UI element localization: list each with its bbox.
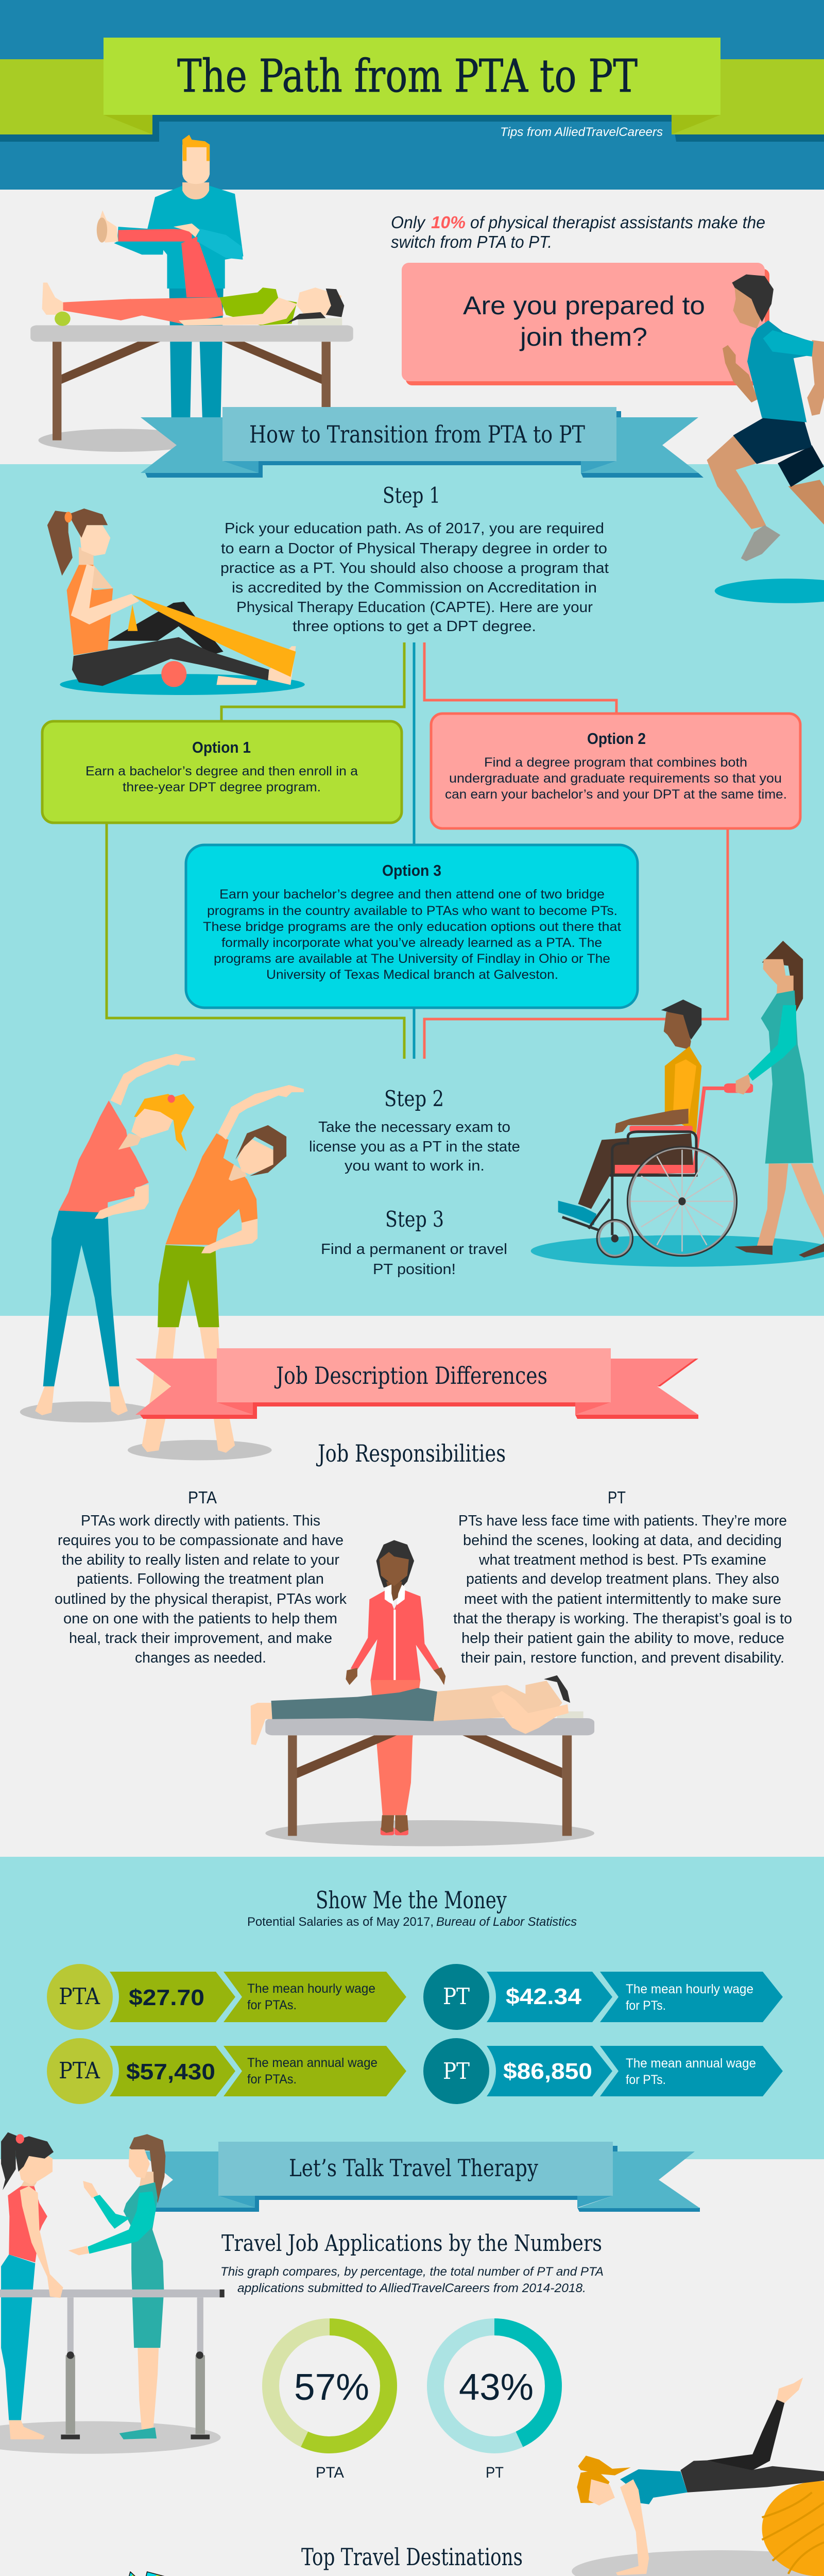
title text: The Path from PTA to PT <box>177 49 638 103</box>
background: steps band <box>0 464 824 1316</box>
panel: option 3: programs are available at The University of Findlay in Ohio or The <box>214 952 610 966</box>
column: PT responsibilities: behind the scenes, looking at data, and deciding <box>463 1532 782 1549</box>
panel: option 2: Option 2 <box>587 730 646 748</box>
intro statistic text: of physical therapist assistants make the <box>470 213 765 232</box>
column: PTA responsibilities: changes as needed. <box>135 1650 266 1666</box>
banner: job description differences <box>135 1348 698 1419</box>
salary card: PTA hourly: The mean hourly wage <box>247 1981 375 1996</box>
salary card: PT hourly <box>423 1964 783 2030</box>
salary card: PT hourly: PT <box>443 1984 470 2010</box>
intro statistic text: Only <box>391 213 426 232</box>
column: PTA responsibilities: heal, track their improvement, and make <box>69 1630 332 1647</box>
panel: option 3: University of Texas Medical branch at Galveston. <box>266 968 558 982</box>
text: graph description: applications submitted to AlliedTravelCareers from 2014-2018. <box>237 2281 586 2295</box>
shadow: runner <box>715 579 824 603</box>
banner: job description differences: Job Description Differences <box>274 1362 547 1389</box>
column: PTA responsibilities: PTAs work directly with patients. This <box>81 1513 320 1529</box>
heading: step 2: Step 2 <box>384 1086 444 1111</box>
salary card: PTA annual: PTA <box>59 2058 100 2084</box>
panel: option 3: programs in the country available to PTAs who want to become PTs. <box>207 904 617 918</box>
panel: option 3 <box>186 845 638 1008</box>
text: step 1 description: practice as a PT. You should also choose a program that <box>220 560 609 577</box>
panel: option 2: Find a degree program that combines both <box>484 755 747 770</box>
heading: top travel destinations: Top Travel Destinations <box>301 2543 523 2571</box>
panel: option 3: Earn your bachelor’s degree and then attend one of two bridge <box>219 887 605 902</box>
column: PTA responsibilities <box>55 1488 347 1666</box>
map: United States with highlighted states <box>97 2572 578 2576</box>
text: salary subtitle <box>247 1915 577 1929</box>
title ribbon <box>0 38 824 142</box>
illustration: two women stretching <box>20 1054 304 1460</box>
callout: are you prepared: join them? <box>519 323 647 351</box>
panel: option 1 <box>42 721 402 823</box>
column: PT responsibilities: patients and develop treatment plans. They also <box>466 1571 779 1587</box>
salary card: PT annual: $86,850 <box>503 2059 592 2084</box>
text: step 1 description: is accredited by the Commission on Accreditation in <box>232 580 597 596</box>
tagline: Tips from AlliedTravelCareers <box>500 125 663 139</box>
text: step 1 description: to earn a Doctor of Physical Therapy degree in order to <box>221 540 607 557</box>
donut chart: PTA 57%: PTA <box>316 2464 344 2481</box>
donut chart: PTA 57% <box>271 2327 388 2481</box>
panel: option 1: three-year DPT degree program. <box>123 780 321 794</box>
panel: option 2: can earn your bachelor’s and your DPT at the same time. <box>445 787 787 802</box>
salary card: PTA annual <box>47 2038 406 2104</box>
column: PT responsibilities: meet with the patient intermittently to make sure <box>464 1591 781 1607</box>
text: step 1 description <box>220 520 609 635</box>
column: PT responsibilities: PT <box>608 1488 626 1507</box>
salary card: PTA annual: The mean annual wage <box>247 2056 377 2070</box>
text: graph description: This graph compares, by percentage, the total number of PT and PTA <box>220 2265 604 2279</box>
banner: let's talk travel therapy <box>139 2142 700 2212</box>
donut chart: PT 43%: 43% <box>459 2367 534 2408</box>
text: step 2 description <box>309 1119 520 1174</box>
illustration: woman exercising on ball <box>572 2378 824 2576</box>
banner: how to transition: How to Transition from PTA to PT <box>249 420 585 448</box>
heading: step 3: Step 3 <box>385 1207 444 1232</box>
text: step 3 description: PT position! <box>373 1261 456 1278</box>
salary card: PT hourly: The mean hourly wage <box>626 1982 753 1996</box>
illustration: women at parallel bars <box>0 2132 225 2454</box>
salary card: PT hourly: for PTs. <box>626 1998 666 2013</box>
column: PTA responsibilities: patients. Following the treatment plan <box>77 1571 324 1587</box>
text: step 1 description: Physical Therapy Education (CAPTE). Here are your <box>236 599 593 616</box>
column: PT responsibilities: that the therapy is working. The therapist’s goal is to <box>453 1611 792 1627</box>
text: step 2 description: license you as a PT in the state <box>309 1139 520 1155</box>
column: PT responsibilities: their pain, restore function, and prevent disability. <box>461 1650 784 1666</box>
column: PT responsibilities <box>453 1488 792 1666</box>
text: salary subtitle: Bureau of Labor Statistics <box>436 1915 577 1929</box>
salary card: PTA annual: $57,430 <box>126 2059 215 2084</box>
intro statistic text: 10% <box>431 213 466 232</box>
callout: are you prepared: Are you prepared to <box>463 291 705 320</box>
panel: option 3: Option 3 <box>382 861 441 879</box>
column: PTA responsibilities: the ability to really listen and relate to your <box>62 1552 339 1568</box>
panel: option 2 <box>431 714 800 828</box>
donut chart: PT 43%: PT <box>486 2464 504 2481</box>
text: step 3 description <box>321 1241 507 1278</box>
illustration: woman with resistance band <box>47 509 305 695</box>
text: salary subtitle: Potential Salaries as of May 2017, <box>247 1915 434 1929</box>
column: PT responsibilities: help their patient gain the ability to move, reduce <box>461 1630 784 1647</box>
panel: option 2: undergraduate and graduate requirements so that you <box>449 771 782 786</box>
background: salary band <box>0 1857 824 2159</box>
intro statistic text <box>391 213 765 251</box>
text: step 2 description: Take the necessary exam to <box>318 1119 510 1136</box>
donut chart: PTA 57%: 57% <box>294 2367 369 2408</box>
banner: let's talk travel therapy: Let’s Talk Travel Therapy <box>289 2154 538 2182</box>
salary card: PTA hourly: for PTAs. <box>247 1998 297 2012</box>
salary card: PTA hourly <box>47 1964 406 2030</box>
panel: option 3: These bridge programs are the only education options out there that <box>203 920 621 934</box>
salary card: PT annual: for PTs. <box>626 2073 666 2087</box>
heading: show me the money: Show Me the Money <box>316 1886 507 1914</box>
illustration: therapist stretching a patient's leg <box>30 134 353 452</box>
salary card: PT annual <box>423 2038 783 2104</box>
panel: option 1: Option 1 <box>192 738 251 756</box>
text: step 3 description: Find a permanent or travel <box>321 1241 507 1258</box>
column: PTA responsibilities: one on one with the patients to help them <box>63 1611 337 1627</box>
text: graph description <box>220 2265 604 2295</box>
column: PTA responsibilities: requires you to be compassionate and have <box>58 1532 344 1549</box>
background: job description band <box>0 1316 824 1857</box>
text: step 2 description: you want to work in. <box>345 1158 485 1174</box>
salary card: PTA annual: for PTAs. <box>247 2072 297 2087</box>
illustration: nurse pushing man in wheelchair <box>531 941 824 1267</box>
intro statistic text: switch from PTA to PT. <box>391 232 552 251</box>
callout: are you prepared <box>402 263 769 385</box>
salary card: PT annual: PT <box>443 2058 470 2084</box>
salary card: PT hourly: $42.34 <box>506 1984 582 2009</box>
column: PT responsibilities: PTs have less face time with patients. They’re more <box>458 1513 787 1529</box>
donut chart: PT 43% <box>436 2327 553 2481</box>
banner: how to transition <box>141 407 703 478</box>
panel: option 3: formally incorporate what you’ve already learned as a PTA. The <box>221 936 602 950</box>
salary card: PT annual: The mean annual wage <box>626 2056 756 2071</box>
column: PT responsibilities: what treatment method is best. PTs examine <box>478 1552 766 1568</box>
salary card: PTA hourly: $27.70 <box>129 1985 204 2010</box>
heading: travel job applications: Travel Job Applications by the Numbers <box>221 2230 602 2257</box>
text: step 1 description: three options to get a DPT degree. <box>293 618 536 635</box>
background: header band <box>0 0 824 190</box>
heading: step 1: Step 1 <box>383 483 440 508</box>
panel: option 1: Earn a bachelor’s degree and then enroll in a <box>85 764 358 778</box>
background: intro band <box>0 190 824 464</box>
illustration: therapist with patient on table <box>251 1540 594 1846</box>
column: PTA responsibilities: outlined by the physical therapist, PTAs work <box>55 1591 347 1607</box>
illustration: runner <box>707 275 824 561</box>
salary card: PTA hourly: PTA <box>59 1984 100 2010</box>
text: step 1 description: Pick your education path. As of 2017, you are required <box>225 520 604 537</box>
flow connectors: options <box>107 642 728 1059</box>
background: travel band <box>0 2159 824 2576</box>
column: PTA responsibilities: PTA <box>188 1488 217 1507</box>
heading: job responsibilities: Job Responsibilities <box>316 1439 506 1467</box>
